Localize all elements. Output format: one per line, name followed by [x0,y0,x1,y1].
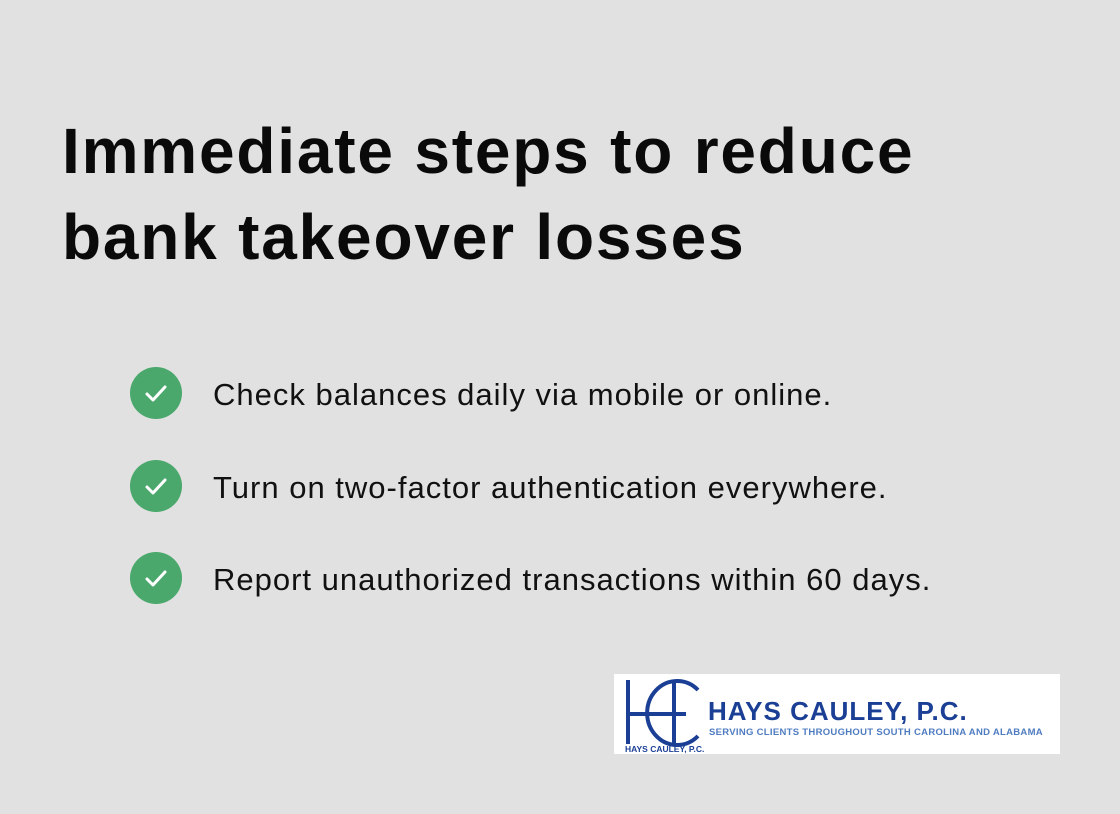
logo: HAYS CAULEY, P.C. [625,744,704,754]
checklist item 3: Report unauthorized transactions within 60 days. [213,562,931,597]
checklist item 1 [130,367,832,419]
icon: check [130,460,182,512]
logo: HAYS CAULEY, P.C. [708,696,968,726]
logo [614,674,1060,754]
checklist item 2 [130,460,888,512]
title: bank takeover losses [62,201,745,273]
logo: SERVING CLIENTS THROUGHOUT SOUTH CAROLINA AND ALABAMA [709,727,1043,738]
checklist item 1: Check balances daily via mobile or online. [213,377,832,412]
icon: check [130,552,182,604]
icon: check [130,367,182,419]
checklist item 3 [130,552,931,604]
title: Immediate steps to reduce [62,115,914,187]
checklist item 2: Turn on two-factor authentication everywhere. [213,470,888,505]
title [62,115,914,273]
